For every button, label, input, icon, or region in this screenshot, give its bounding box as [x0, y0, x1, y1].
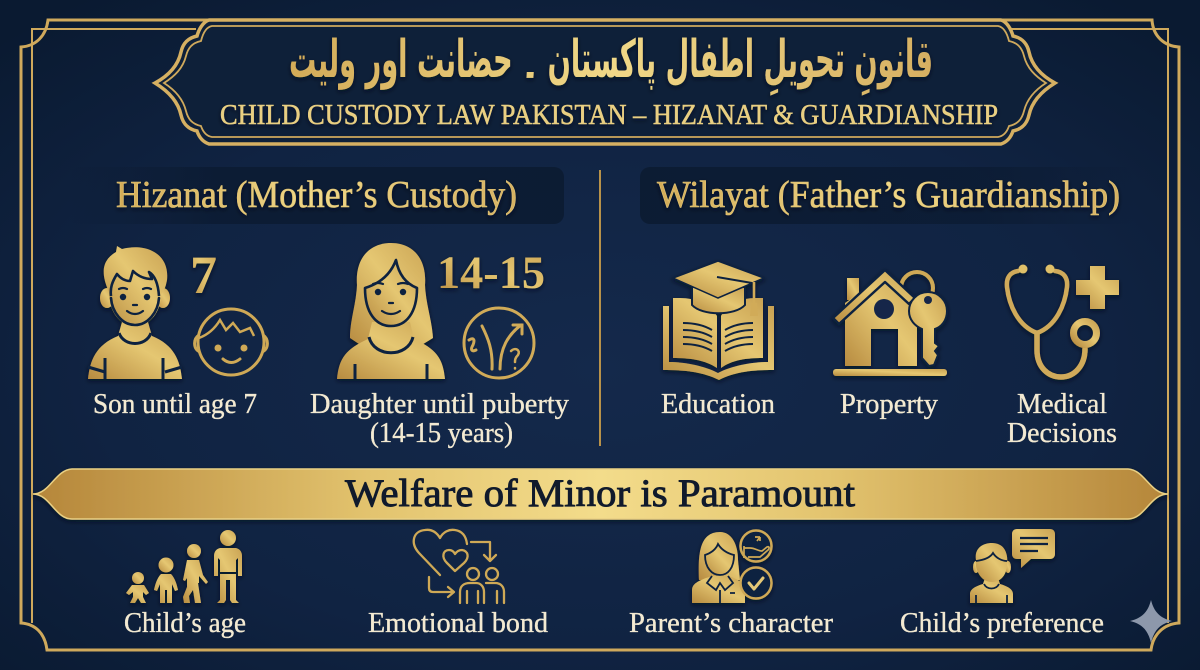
icon: boy [88, 246, 182, 379]
caption: medical decisions: Decisions [1007, 418, 1117, 449]
section divider [599, 170, 601, 446]
caption: son until age 7: Son until age 7 [93, 389, 257, 420]
icon: sparkle watermark [1130, 600, 1172, 643]
panel: Wilayat heading [640, 167, 1135, 224]
caption: emotional bond: Emotional bond [368, 608, 548, 639]
icon: girl [337, 243, 445, 379]
caption: medical decisions: Medical [1017, 389, 1107, 420]
caption: child's age: Child’s age [124, 608, 246, 639]
title plaque [155, 20, 1055, 144]
icon: emotional bond hearts and family [414, 530, 504, 603]
icon: stethoscope and cross [1007, 264, 1119, 377]
icon: child's preference speech bubble [970, 529, 1055, 603]
panel: Wilayat heading: Wilayat (Father’s Guardianship) [657, 174, 1120, 216]
caption: parent's character: Parent’s character [629, 608, 834, 639]
caption: daughter until puberty [310, 389, 569, 449]
caption: education: Education [661, 389, 775, 420]
panel: Hizanat heading [68, 167, 564, 224]
age number 14-15: 14-15 [437, 247, 545, 299]
panel: Hizanat heading: Hizanat (Mother’s Custody) [116, 174, 517, 216]
icon: growing children [126, 530, 242, 603]
icon: diverging paths in circle [464, 308, 534, 378]
icon: education book and cap [663, 261, 774, 380]
caption: property: Property [840, 389, 938, 420]
icon: house and key [833, 270, 947, 376]
caption: medical decisions [1007, 389, 1117, 449]
icon: small boy face in circle [195, 309, 267, 375]
icon: parent's character [692, 530, 772, 603]
banner: welfare of minor: Welfare of Minor is Paramount [345, 472, 855, 515]
caption: child's preference: Child’s preference [900, 608, 1104, 639]
age number 7: 7 [190, 245, 217, 305]
caption: daughter until puberty: (14-15 years) [370, 418, 513, 449]
English title: CHILD CUSTODY LAW PAKISTAN – HIZANAT & GUARDIANSHIP [220, 99, 998, 131]
caption: daughter until puberty: Daughter until puberty [310, 389, 569, 420]
banner: welfare of minor [33, 469, 1168, 519]
